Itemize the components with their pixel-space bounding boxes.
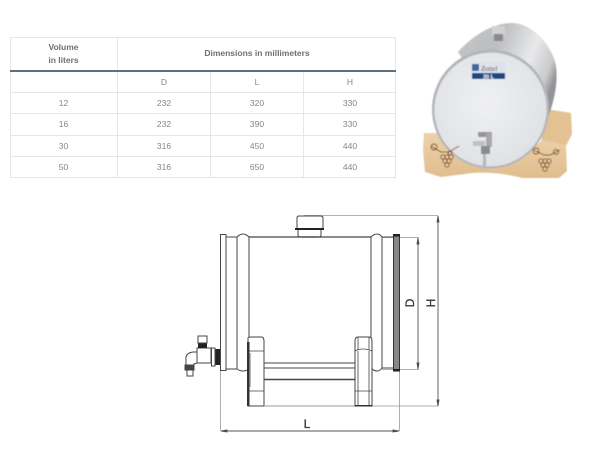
barrel rim — [419, 36, 562, 182]
dimension guide lines — [220, 216, 438, 431]
row: 30 liters: 30 — [59, 141, 68, 151]
table header: volume: in liters — [48, 55, 79, 65]
table header: volume — [48, 42, 79, 65]
panel: dimensions table — [10, 37, 396, 178]
row: 16 liters: 16 — [59, 119, 68, 129]
row: 12 liters: 320 — [250, 98, 264, 108]
wooden rear cradle — [540, 109, 572, 150]
row: 12 liters: 12 — [59, 98, 68, 108]
row: 30 liters: 440 — [343, 141, 357, 151]
row: 16 liters: 390 — [250, 119, 264, 129]
dimension label: H: H — [424, 299, 438, 307]
left stand foot — [247, 337, 264, 406]
dimension label: D: D — [403, 298, 417, 307]
row: 30 liters: 450 — [250, 141, 264, 151]
column header: D: D — [161, 77, 167, 87]
row: 50 liters: 440 — [343, 162, 357, 172]
arrow: dimension H — [437, 216, 439, 406]
stand cross bars — [264, 363, 355, 406]
row: 50 liters: 50 — [59, 162, 68, 172]
dimension label: L: L — [304, 417, 311, 431]
arrow: dimension D — [417, 238, 419, 369]
barrel body — [458, 23, 557, 136]
right stand foot — [355, 337, 372, 406]
barrel outline — [249, 237, 371, 368]
row: 30 liters — [59, 141, 357, 151]
grape icon left — [431, 144, 459, 167]
table header: volume: Volume — [48, 42, 79, 52]
row: 16 liters: 330 — [343, 119, 357, 129]
tap — [185, 336, 220, 376]
row: 12 liters — [59, 98, 357, 108]
label: Zottel 30 L: 30 L — [483, 74, 495, 80]
grape icon right — [533, 148, 560, 171]
technical drawing of barrel — [185, 216, 439, 432]
tap — [473, 132, 492, 169]
right rings and flange — [371, 234, 400, 372]
column header: L: L — [255, 77, 259, 87]
row: 12 liters: 232 — [157, 98, 171, 108]
label: Zottel 30 L — [471, 62, 506, 80]
photo: stainless steel barrel on wooden stand — [419, 23, 572, 182]
row: 30 liters: 316 — [157, 141, 171, 151]
label: Zottel 30 L: Zottel — [481, 65, 497, 73]
top bung — [492, 26, 505, 41]
row: 12 liters: 330 — [343, 98, 357, 108]
top bung — [295, 216, 324, 237]
table header: dimensions: Dimensions in millimeters — [204, 48, 310, 58]
barrel front disc — [422, 40, 559, 179]
row: 16 liters — [59, 119, 357, 129]
row: 50 liters: 650 — [250, 162, 264, 172]
left flange and rings — [220, 234, 249, 371]
arrow: dimension L — [221, 430, 399, 432]
row: 16 liters: 232 — [157, 119, 171, 129]
row: 50 liters — [59, 162, 357, 172]
row: 50 liters: 316 — [157, 162, 171, 172]
column header: H: H — [347, 77, 353, 87]
wooden front board — [423, 133, 567, 178]
